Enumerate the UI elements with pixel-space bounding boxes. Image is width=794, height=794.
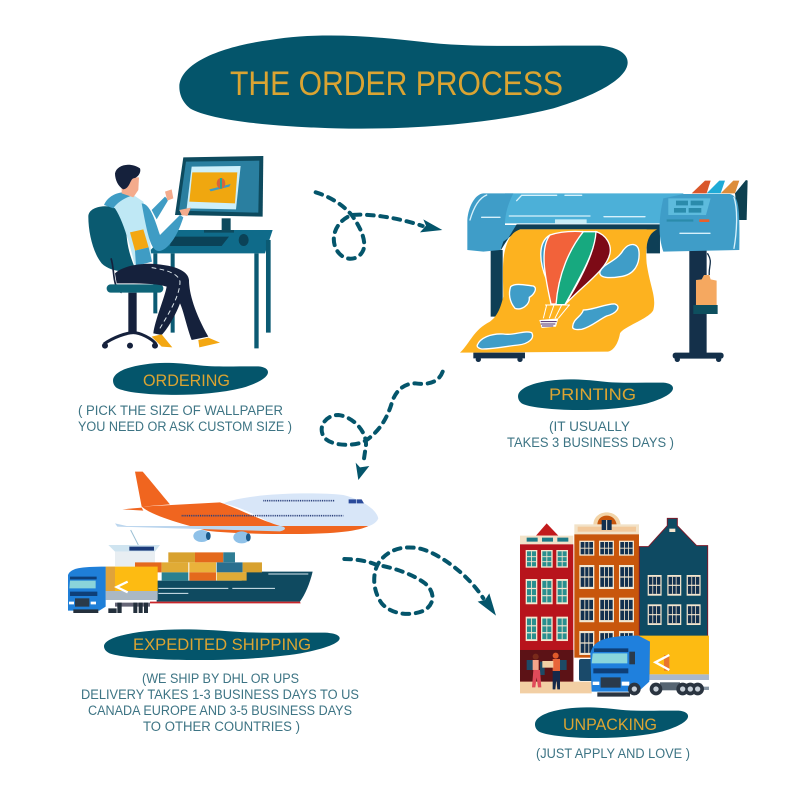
text: printing description	[507, 419, 674, 450]
text: ordering description: YOU NEED OR ASK CUSTOM SIZE )	[78, 419, 292, 434]
text: ordering description: ( PICK THE SIZE OF WALLPAPER	[78, 403, 283, 418]
airplane	[115, 472, 378, 543]
text: ordering description	[78, 403, 292, 434]
delivery truck	[579, 636, 709, 697]
label: expedited shipping	[104, 629, 340, 660]
two people at door	[532, 653, 560, 689]
red building	[520, 523, 573, 684]
label: ordering	[113, 363, 268, 395]
label: ordering: ORDERING	[143, 371, 230, 390]
text: shipping description: (WE SHIP BY DHL OR UPS	[142, 671, 299, 686]
arrow: shipping to unpacking	[344, 547, 496, 616]
illustration: buildings with truck	[520, 512, 709, 697]
arrow: printing to shipping	[322, 372, 443, 480]
teal building	[639, 518, 708, 638]
title banner: THE ORDER PROCESS	[230, 65, 563, 103]
text: shipping description	[81, 671, 359, 734]
pavement	[520, 682, 592, 693]
illustration: wide format printer	[460, 180, 748, 362]
label: printing: PRINTING	[549, 385, 636, 404]
text: printing description: (IT USUALLY	[549, 419, 630, 434]
text: unpacking description: (JUST APPLY AND LOVE )	[536, 746, 690, 761]
label: unpacking: UNPACKING	[563, 715, 657, 734]
label: expedited shipping: EXPEDITED SHIPPING	[133, 635, 311, 654]
text: shipping description: DELIVERY TAKES 1-3 BUSINESS DAYS TO US	[81, 687, 359, 702]
illustration: person ordering at computer	[88, 156, 273, 349]
text: printing description: TAKES 3 BUSINESS DAYS )	[507, 435, 674, 450]
illustration: plane, ship and truck	[68, 472, 378, 613]
container ship	[108, 530, 313, 603]
text: shipping description: TO OTHER COUNTRIES )	[143, 719, 300, 734]
orange building	[574, 512, 639, 658]
title banner	[179, 36, 628, 129]
arrow: ordering to printing	[316, 192, 442, 259]
delivery truck	[68, 567, 158, 613]
text: shipping description: CANADA EUROPE AND 3-5 BUSINESS DAYS	[88, 703, 352, 718]
label: printing	[518, 379, 673, 410]
label: unpacking	[535, 707, 688, 738]
